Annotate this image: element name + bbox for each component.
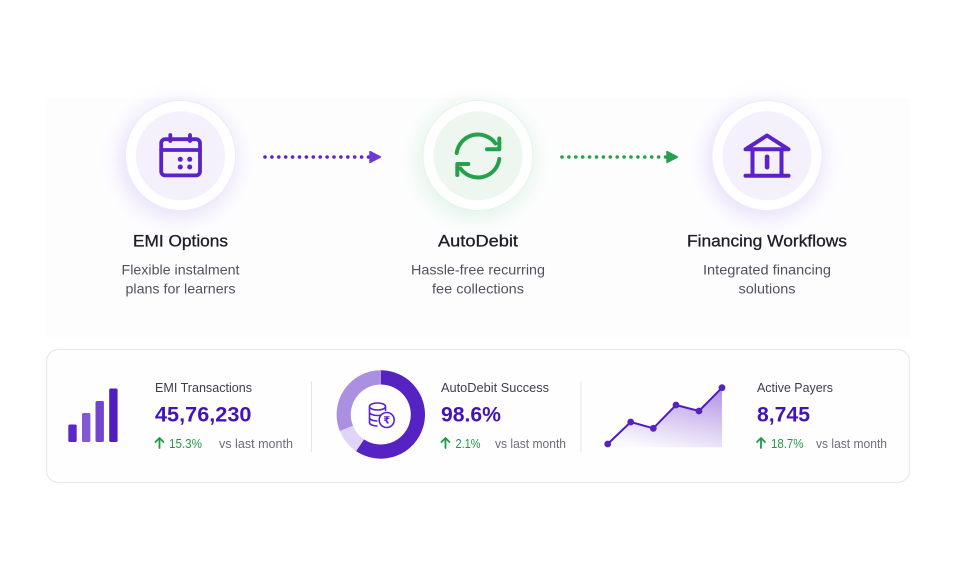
bar chart icon [68, 388, 118, 442]
metric: EMI Transactions [68, 381, 293, 451]
metric: AutoDebit Success [344, 377, 566, 452]
description: EMI Options [122, 262, 240, 296]
description: Financing Workflows [703, 262, 831, 296]
icon: calendar [120, 100, 236, 218]
heading: AutoDebit: AutoDebit [438, 232, 518, 250]
change [442, 437, 566, 451]
change: 15.3% [169, 437, 202, 451]
arrow: AutoDebit to Financing [562, 152, 678, 162]
heading: EMI Options: EMI Options [133, 232, 228, 250]
step: Financing Workflows [687, 100, 847, 296]
change: vs last month [816, 437, 887, 451]
value: 98.6% [441, 404, 501, 426]
label: EMI Transactions [155, 381, 252, 395]
icon: coins with rupee: ₹ [383, 416, 390, 426]
change: 2.1% [456, 437, 480, 451]
label: AutoDebit Success [441, 381, 549, 395]
donut chart [344, 377, 418, 452]
change: 18.7% [771, 437, 804, 451]
description: Financing Workflows: solutions [738, 280, 796, 296]
change [757, 437, 887, 451]
value: 45,76,230 [155, 404, 252, 426]
description: EMI Options: Flexible instalment [122, 262, 240, 278]
change [156, 437, 293, 451]
description: AutoDebit [411, 262, 545, 296]
icon: bank building [707, 100, 823, 218]
change: vs last month [219, 437, 293, 451]
metric: Active Payers [604, 381, 887, 451]
description: AutoDebit: fee collections [432, 280, 524, 296]
description: Financing Workflows: Integrated financing [703, 262, 831, 278]
label: Active Payers [757, 381, 833, 395]
step: EMI Options [120, 100, 240, 296]
value: 8,745 [757, 404, 810, 426]
heading: Financing Workflows: Financing Workflows [687, 232, 847, 250]
icon: sync arrows [418, 100, 534, 218]
change: vs last month [495, 437, 566, 451]
line chart [604, 384, 725, 447]
description: AutoDebit: Hassle-free recurring [411, 262, 545, 278]
panel: metrics card [46, 350, 910, 482]
arrow: EMI to AutoDebit [265, 152, 380, 162]
description: EMI Options: plans for learners [126, 280, 236, 296]
step: AutoDebit [411, 100, 545, 296]
